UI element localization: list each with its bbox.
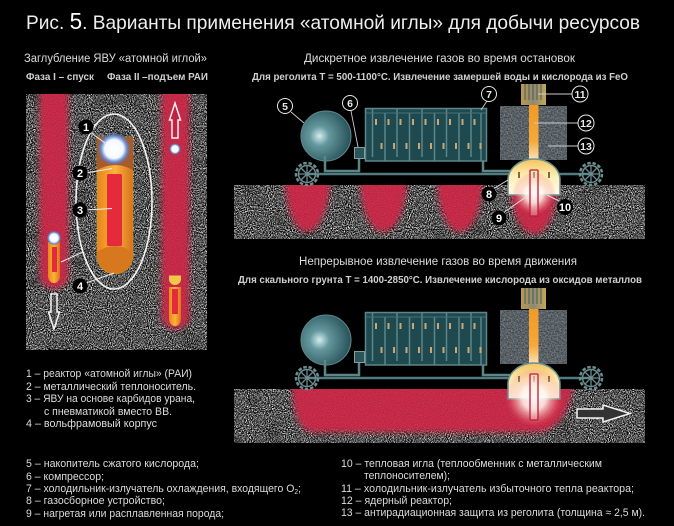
callouts 8-10: 9 (496, 213, 502, 225)
legend: needle: 1 – реактор «атомной иглы» (РАИ) (26, 368, 192, 380)
callouts 5-7, 11-13: 5 (282, 101, 288, 113)
callouts 5-7, 11-13: 11 (574, 89, 586, 101)
arrow down (48, 294, 60, 329)
melted trench (292, 370, 574, 432)
callouts 1-4: 4 (77, 281, 84, 293)
heat needle (530, 170, 538, 216)
legend: items 5-9: 9 – нагретая или расплавленная порода; (26, 508, 224, 520)
oval highlight (76, 114, 152, 289)
regolith ground (234, 185, 645, 239)
legend: needle: 2 – металлический теплоноситель. (26, 381, 196, 393)
movement arrow (577, 405, 630, 422)
melt channels (40, 70, 189, 329)
legend: items 10-13: 10 – тепловая игла (теплообменник с металлическим (341, 458, 602, 470)
detached reactor glow (169, 143, 181, 155)
callouts 5-7, 11-13: 13 (580, 141, 592, 153)
legend: items 10-13: 12 – ядерный реактор; (341, 495, 452, 507)
panel: continuous extraction scene (234, 288, 645, 443)
callouts 5-7, 11-13 (278, 86, 594, 154)
excess heat cooler (521, 84, 546, 105)
legend: items 5-9: ; (298, 483, 301, 495)
legend: items 5-9: 5 – накопитель сжатого кислорода; (26, 458, 199, 470)
heat needle (530, 374, 538, 420)
small capsule ascending (169, 276, 181, 326)
callouts 1-4 (61, 120, 114, 294)
legend: items 5-9: 8 – газосборное устройство; (26, 495, 165, 507)
radiator (366, 108, 510, 171)
arrow up (170, 103, 180, 138)
callouts 5-7, 11-13: 12 (580, 118, 592, 130)
heading: left panel: Заглубление ЯВУ «атомной иглой» (24, 53, 207, 65)
legend: items 5-9: 6 – компрессор; (26, 471, 104, 483)
title: Рис. 5. Варианты применения «атомной иглы» для добычи ресурсов (26, 8, 640, 34)
large needle capsule (97, 132, 133, 274)
chassis pipe (307, 173, 591, 175)
heading: continuous extraction: Непрерывное извлечение газов во время движения (299, 256, 577, 268)
machine: vehicle repeat (296, 288, 602, 399)
legend: items 5-9 (26, 458, 301, 520)
gas collector dome (508, 159, 560, 195)
wheel left (296, 163, 318, 185)
callouts 8-10: 8 (486, 189, 492, 201)
panel: atomic needle burial (26, 70, 207, 350)
phase labels (26, 71, 208, 83)
radiation shield (500, 106, 567, 160)
legend: needle: 3 – ЯВУ на основе карбидов урана, (26, 393, 195, 405)
needle glow (504, 368, 564, 428)
machine: vehicle (296, 84, 602, 195)
phase labels: Фаза II –подъем РАИ (107, 71, 208, 83)
callouts 8-10: 10 (559, 202, 571, 214)
reactor column (529, 105, 538, 165)
legend: items 10-13: 13 – антирадиационная защита из реголита (толщина ≈ 2,5 м). (341, 507, 645, 519)
legend: items 10-13: 11 – холодильник-излучатель избыточного тепла реактора; (341, 483, 634, 495)
small capsule descending (46, 230, 62, 283)
callouts 1-4: 3 (77, 205, 83, 217)
callouts 1-4: 1 (83, 122, 89, 134)
legend: items 10-13: теплоносителем); (364, 470, 450, 482)
panel: discrete extraction scene (234, 84, 645, 239)
needle glow (512, 172, 556, 216)
legend: needle: 4 – вольфрамовый корпус (26, 418, 157, 430)
callouts 8-10 (482, 180, 573, 226)
legend: items 5-9: 7 – холодильник-излучатель охлаждения, входящего O (26, 483, 308, 495)
compressor (354, 148, 364, 158)
legend: items 10-13 (341, 458, 645, 519)
heading: discrete extraction: Дискретное извлечение газов во время остановок (304, 53, 576, 65)
soil texture (26, 94, 207, 350)
wheel right (580, 163, 602, 185)
subheading: regolith: Для реголита T = 500-1100°C. Извлечение замершей воды и кислорода из FeO (252, 71, 628, 83)
legend: needle: с пневматикой вместо ВВ. (44, 406, 172, 418)
callouts 5-7, 11-13: 7 (486, 89, 492, 101)
oxygen tank (301, 111, 359, 171)
melted pits (285, 170, 558, 234)
subheading: rocky ground: Для скального грунта T = 1400-2850°C. Извлечение кислорода из оксидов металлов (238, 274, 642, 286)
phase labels: Фаза I – спуск (26, 71, 95, 83)
rocky ground (234, 389, 645, 443)
callouts 1-4: 2 (77, 168, 83, 180)
legend: items 5-9: 2 (294, 489, 298, 496)
callouts 5-7, 11-13: 6 (347, 98, 353, 110)
legend: needle (26, 368, 196, 430)
